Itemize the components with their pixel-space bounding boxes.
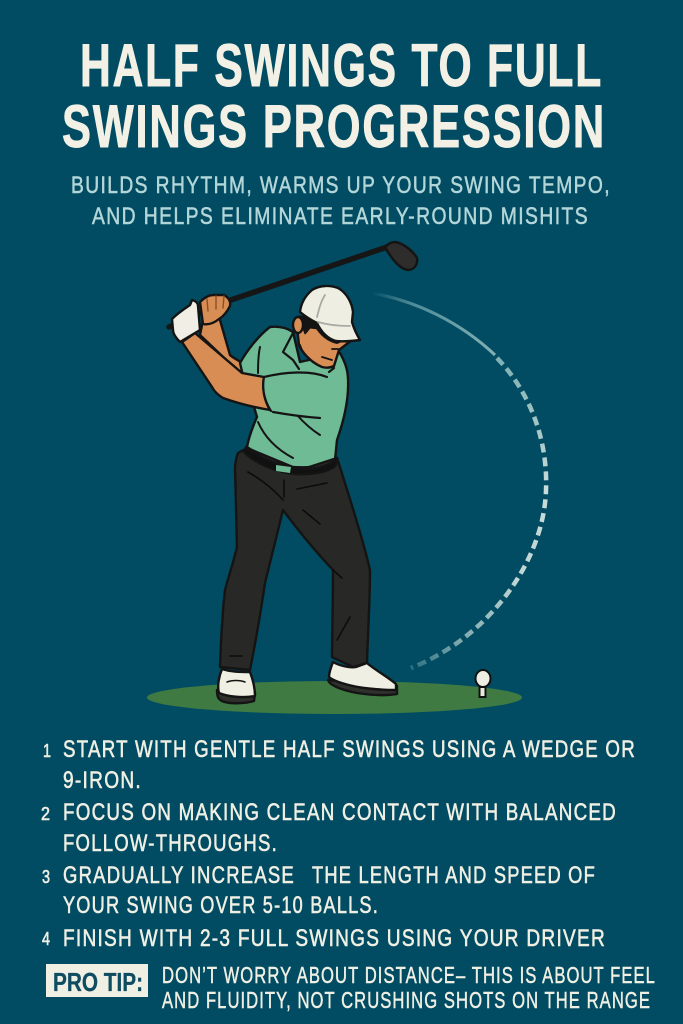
step 3: 3	[42, 867, 50, 887]
step 3: GRADUALLY INCREASE	[63, 862, 295, 889]
collar	[283, 333, 299, 369]
step 1: 1	[43, 741, 51, 761]
swing arc	[372, 293, 546, 668]
sleeve	[263, 368, 347, 418]
step 1	[43, 736, 636, 794]
ground	[147, 681, 522, 714]
front arm	[182, 333, 270, 410]
back arm	[200, 313, 244, 374]
pants	[220, 448, 370, 670]
step 4: 4	[42, 929, 50, 949]
belt	[244, 447, 337, 474]
step 3	[42, 862, 596, 919]
step 3: THE LENGTH AND SPEED OF	[312, 862, 596, 889]
step 2: 2	[41, 804, 50, 824]
cap	[300, 286, 360, 341]
right shoe	[328, 662, 397, 695]
icon: golf ball on tee	[476, 670, 490, 697]
step 2	[41, 799, 617, 857]
shirt	[240, 327, 348, 467]
subtitle	[71, 172, 611, 230]
title	[62, 32, 606, 160]
golfer	[169, 242, 417, 703]
neck and face	[293, 316, 352, 368]
pro tip text	[162, 962, 656, 1013]
steps list	[41, 736, 636, 952]
golf club	[169, 242, 417, 327]
hand	[200, 295, 230, 324]
glove	[172, 300, 200, 342]
step 2: FOLLOW-THROUGHS.	[63, 830, 278, 857]
pro tip badge: PRO TIP:	[53, 967, 143, 997]
step 3: YOUR SWING OVER 5-10 BALLS.	[63, 892, 379, 919]
left shoe	[217, 669, 255, 703]
step 1: 9-IRON.	[63, 767, 142, 794]
